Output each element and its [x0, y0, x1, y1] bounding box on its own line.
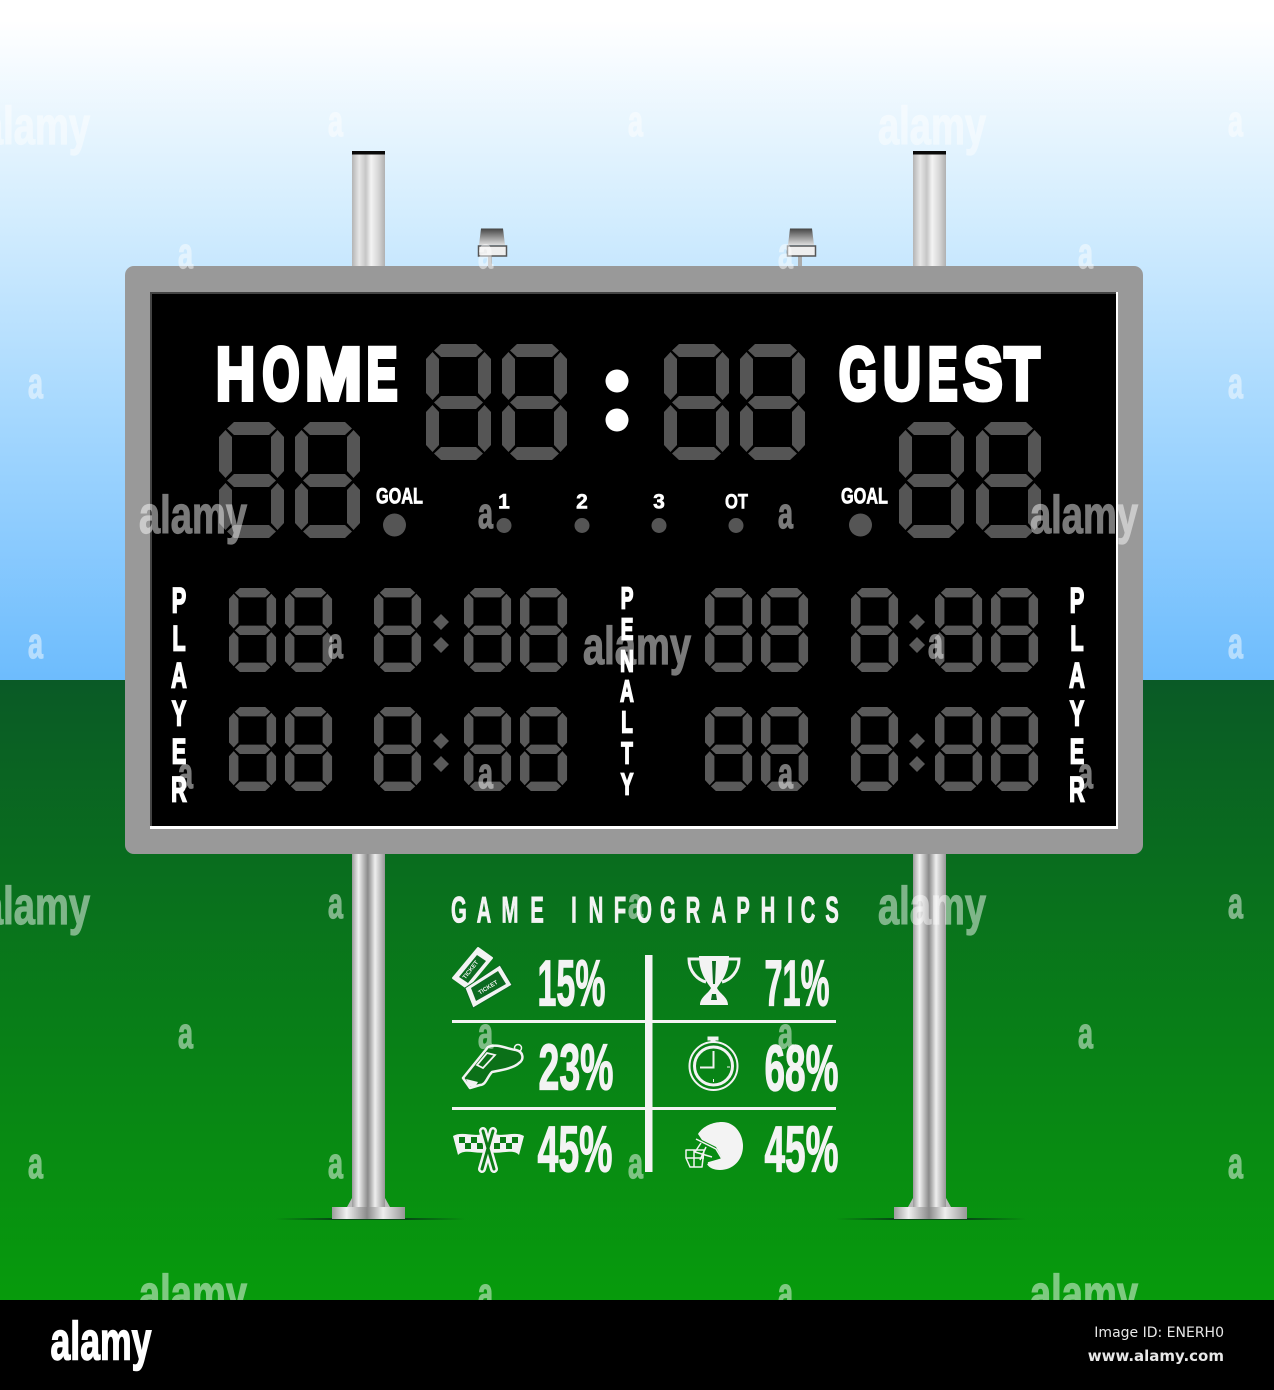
icon: tickets: TICKET — [462, 960, 480, 981]
footer logo: alamy — [50, 1312, 152, 1372]
clock digits — [426, 344, 805, 460]
goal indicator: home — [376, 484, 423, 536]
value: 68%: 68% — [764, 1032, 838, 1104]
heading: HOME: E — [366, 332, 398, 416]
watermark overlay: a — [478, 229, 493, 278]
watermark overlay: a — [1228, 879, 1243, 928]
scoreboard screen — [150, 292, 1118, 829]
penalty digits: right, row 2 — [705, 707, 1038, 791]
watermark overlay: a — [328, 1139, 343, 1188]
watermark overlay: a — [28, 619, 43, 668]
value: 45% right: 45% — [764, 1112, 838, 1186]
right pole — [894, 151, 967, 1219]
vertical label: PLAYER right: PLAYER — [1069, 582, 1085, 810]
icon: trophy — [689, 956, 739, 1005]
image ID: Image ID: ENERH0 — [1094, 1325, 1224, 1341]
heading: GUEST — [839, 332, 1040, 416]
watermark overlay: a — [1228, 619, 1243, 668]
watermark overlay: a — [1228, 97, 1243, 146]
ground shadows — [275, 1218, 1026, 1220]
watermark overlay: a — [628, 97, 643, 146]
watermark overlay: a — [1228, 1139, 1243, 1188]
watermark overlay: a — [328, 879, 343, 928]
watermark overlay: a — [178, 1009, 193, 1058]
icon: tickets: TICKET — [478, 980, 500, 996]
heading: GUEST: U — [883, 332, 921, 416]
watermark overlay: a — [928, 619, 943, 668]
icon: checkered flags — [453, 1131, 524, 1169]
watermark overlay: a — [328, 97, 343, 146]
period indicators: 1 — [498, 490, 510, 514]
watermark overlay: a — [778, 1009, 793, 1058]
heading: GUEST: S — [964, 332, 1002, 416]
watermark overlay: a — [628, 879, 643, 928]
watermark overlay: a — [778, 229, 793, 278]
icon: whistle — [463, 1044, 522, 1088]
watermark overlay: alamy — [139, 486, 247, 545]
left pole — [332, 151, 405, 1219]
background: grass field — [0, 680, 1274, 1300]
infographic title: GAME INFOGRAPHICS — [451, 890, 839, 931]
watermark overlay: a — [478, 489, 493, 538]
text: 71% — [764, 946, 830, 1020]
penalty digits: left, row 2 — [229, 707, 567, 791]
value: 45% left: 45% — [538, 1112, 612, 1186]
watermark overlay: a — [478, 749, 493, 798]
watermark overlay: a — [28, 1139, 43, 1188]
right floodlight — [788, 228, 816, 267]
watermark overlay: a — [328, 619, 343, 668]
watermark overlay: a — [628, 1139, 643, 1188]
watermark overlay: alamy — [139, 1265, 247, 1324]
icon: tickets — [453, 948, 512, 1008]
website: www.alamy.com — [1088, 1347, 1224, 1365]
clock colon — [606, 370, 628, 432]
guest score digits — [899, 422, 1041, 538]
period indicators — [496, 490, 748, 533]
icon: stopwatch — [690, 1037, 738, 1090]
period indicators: 3 — [653, 490, 665, 514]
vertical label: PLAYER left: PLAYER — [171, 582, 187, 810]
heading: HOME: H — [216, 332, 255, 416]
period indicators: 2 — [576, 490, 588, 514]
watermark overlay: a — [778, 1269, 793, 1318]
watermark overlay: alamy — [583, 617, 691, 676]
goal indicator: guest: GOAL — [841, 484, 888, 508]
watermark overlay: alamy — [878, 97, 986, 156]
watermark overlay: a — [478, 1009, 493, 1058]
background: sky — [0, 0, 1274, 680]
watermark overlay: a — [1078, 749, 1093, 798]
watermark overlay: a — [778, 489, 793, 538]
heading: GUEST: E — [928, 332, 958, 416]
period indicators: OT — [725, 490, 748, 514]
goal indicator: home: GOAL — [376, 484, 423, 508]
heading: HOME — [216, 332, 398, 416]
value: 23%: 23% — [538, 1030, 614, 1104]
footer bar — [0, 1300, 1274, 1390]
watermark overlay: a — [478, 1269, 493, 1318]
infographic grid lines — [452, 955, 836, 1172]
heading: HOME: M — [305, 332, 362, 416]
goal indicator: guest — [841, 484, 888, 536]
watermark overlay: a — [28, 359, 43, 408]
home score digits — [219, 422, 360, 538]
watermark overlay: a — [1228, 359, 1243, 408]
icon: football helmet — [686, 1122, 743, 1170]
value: 15%: 15% — [538, 946, 606, 1020]
heading: GUEST: G — [839, 332, 877, 416]
penalty digits: right, row 1 — [705, 588, 1038, 672]
left floodlight — [478, 228, 506, 267]
scoreboard frame — [125, 266, 1143, 854]
penalty digits: left, row 1 — [229, 588, 567, 672]
watermark overlay: alamy — [1030, 486, 1138, 545]
watermark overlay: a — [1078, 1009, 1093, 1058]
watermark overlay: alamy — [1030, 1265, 1138, 1324]
watermark overlay: alamy — [878, 877, 986, 936]
heading: GUEST: T — [1004, 332, 1040, 416]
watermark overlay: a — [1078, 229, 1093, 278]
watermark overlay: a — [778, 749, 793, 798]
watermark overlay: a — [178, 749, 193, 798]
vertical label: PENALTY: PENALTY — [620, 582, 634, 802]
watermark overlay: a — [178, 229, 193, 278]
heading: HOME: O — [262, 332, 300, 416]
